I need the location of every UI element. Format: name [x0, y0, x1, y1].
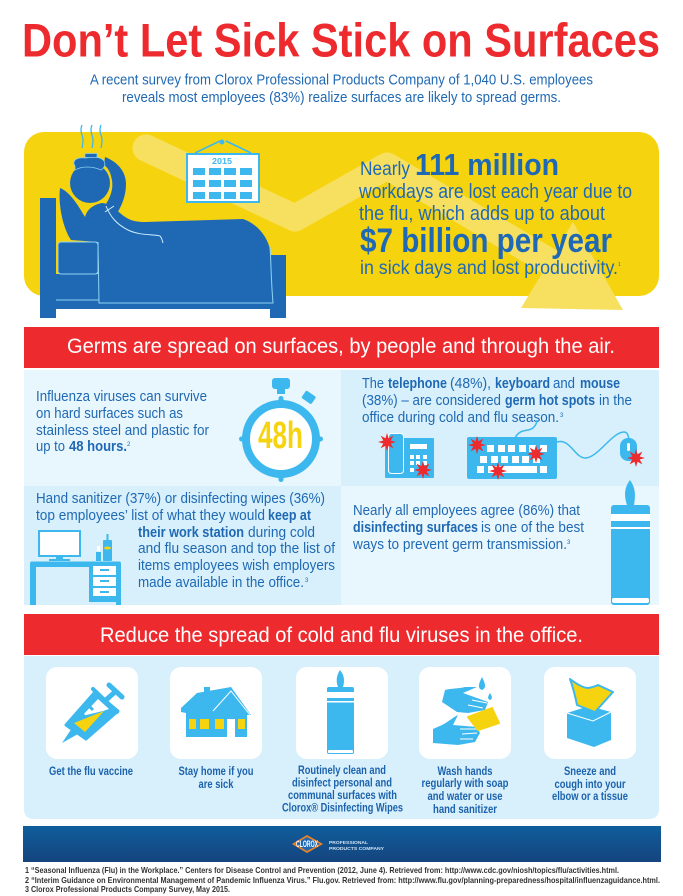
- subtitle: reveals most employees (83%) realize surfaces are likely to spread germs.: [122, 90, 561, 106]
- disinfecting text: [352, 502, 585, 553]
- panel: hand sanitizer and wipes: [24, 486, 341, 605]
- flu cost text: 1: [618, 262, 621, 268]
- decorative trend arrow: [146, 148, 623, 310]
- icon: mouse: [557, 432, 645, 467]
- tip: disinfect surfaces: Routinely clean and: [298, 765, 386, 777]
- bed frame: [40, 198, 286, 318]
- panel: virus survival: [24, 370, 341, 486]
- head: [70, 163, 110, 203]
- disinfecting text: Nearly all employees agree (86%) that: [353, 502, 581, 519]
- heading band: reduce the spread: [24, 614, 659, 655]
- logo: Clorox: [292, 835, 384, 853]
- tip: sneeze into tissue: cough into your: [554, 779, 626, 791]
- panel: germ hot spots: [341, 370, 659, 486]
- survival text: on hard surfaces such as: [36, 405, 183, 422]
- footer band with logo: [23, 826, 661, 862]
- flu cost text: Nearly: [360, 159, 410, 180]
- tip: wash hands: Wash hands: [438, 766, 492, 778]
- heading band: germs are spread: [24, 327, 659, 368]
- raised arm: [104, 157, 126, 215]
- blanket outlines: [98, 242, 273, 303]
- flu cost text: 111 million: [415, 147, 559, 182]
- sanitizer text: during cold: [248, 524, 315, 541]
- disinfecting text: ways to prevent germ transmission.: [352, 536, 567, 553]
- disinfecting text: is one of the best: [481, 519, 585, 536]
- panel: prevention tips: [24, 656, 659, 819]
- icon: calendar 2015: [187, 140, 259, 202]
- tip: sneeze into tissue: [544, 667, 636, 803]
- heading band: germs are spread: Germs are spread on surfaces, by people and through the air.: [67, 335, 615, 358]
- icon: house: [181, 687, 251, 738]
- person body and blanket: [60, 188, 273, 303]
- icon: tissue box: [567, 679, 613, 747]
- icon: stopwatch 48h: 48h: [258, 415, 303, 457]
- flu cost text: workdays are lost each year due to: [358, 181, 632, 203]
- tip: wash hands: [419, 667, 511, 816]
- tip: disinfect surfaces: Clorox® Disinfecting Wipes: [282, 802, 403, 814]
- sanitizer text: and flu season and top the list of: [138, 540, 336, 557]
- tip: disinfect surfaces: disinfect personal and: [292, 778, 392, 790]
- tip: wash hands: regularly with soap: [422, 778, 508, 790]
- flu cost text: [358, 147, 632, 279]
- icon: wipes canister: [327, 670, 354, 754]
- sanitizer text: made available in the office.: [138, 574, 304, 591]
- icon: hands and soap: [433, 677, 499, 745]
- hot spots text: 3: [560, 413, 564, 419]
- sanitizer text: 3: [305, 578, 309, 584]
- sanitizer text: Hand sanitizer (37%) or disinfecting wipes (36%): [36, 490, 325, 507]
- hot spots text: mouse: [580, 375, 620, 392]
- flu cost text: $7 billion per year: [360, 222, 612, 260]
- tip: disinfect surfaces: communal surfaces with: [288, 790, 397, 802]
- tip: sneeze into tissue: Sneeze and: [564, 766, 616, 778]
- disinfecting text: disinfecting surfaces: [353, 519, 478, 536]
- flu cost text: the flu, which adds up to about: [359, 203, 605, 225]
- tip: wash hands: hand sanitizer: [433, 804, 497, 816]
- tip: wash hands: and water or use: [428, 791, 502, 803]
- footnotes: 3 Clorox Professional Products Company Survey, May 2015.: [25, 884, 230, 894]
- sanitizer text: items employees wish employers: [138, 557, 335, 574]
- flu cost text: in sick days and lost productivity.: [360, 258, 618, 279]
- logo: Clorox: PROFESSIONAL: [329, 840, 368, 845]
- tip: flu vaccine: [46, 667, 138, 778]
- subtitle: A recent survey from Clorox Professional Products Company of 1,040 U.S. employees: [90, 72, 593, 88]
- tip: disinfect surfaces: [282, 667, 403, 814]
- hot spots text: in the: [599, 392, 632, 409]
- hot spots text: office during cold and flu season.: [362, 409, 559, 426]
- pillow: [58, 242, 98, 274]
- logo: Clorox: CLOROX: [296, 839, 318, 849]
- hot spots text: (48%),: [450, 375, 491, 392]
- icon: stopwatch 48h: [239, 378, 323, 482]
- sanitizer text: top employees’ list of what they would: [36, 507, 265, 524]
- tip: stay home: Stay home if you: [178, 766, 254, 778]
- sanitizer text: their work station: [138, 524, 244, 541]
- icon: calendar 2015: 2015: [212, 156, 232, 166]
- tip: stay home: are sick: [198, 779, 234, 791]
- survival text: stainless steel and plastic for: [36, 422, 209, 439]
- survival text: 2: [127, 442, 131, 448]
- subtitle: [90, 72, 593, 106]
- survival text: Influenza viruses can survive: [36, 388, 207, 405]
- hot spots text: The: [362, 375, 384, 392]
- survival text: up to: [36, 438, 65, 455]
- tip: stay home: [170, 667, 262, 791]
- ice bag: [74, 157, 105, 170]
- tip: sneeze into tissue: elbow or a tissue: [552, 791, 628, 803]
- hot spots text: telephone: [388, 375, 447, 392]
- survival text: 48 hours.: [69, 438, 127, 455]
- sanitizer text: [36, 490, 336, 591]
- panel: disinfecting surfaces: [341, 480, 659, 605]
- panel: flu cost hero: [24, 125, 659, 318]
- icon: desk: [30, 531, 121, 605]
- footnotes: [25, 865, 660, 894]
- hot spots text: germ hot spots: [505, 392, 595, 409]
- logo: Clorox: PRODUCTS COMPANY: [329, 846, 384, 851]
- heading band: reduce the spread: Reduce the spread of cold and flu viruses in the office.: [100, 624, 583, 647]
- survival text: [36, 388, 209, 455]
- hot spots text: (38%) – are considered: [362, 392, 501, 409]
- sanitizer text: keep at: [268, 507, 311, 524]
- disinfecting text: 3: [567, 540, 571, 546]
- icon: keyboard: [467, 420, 557, 480]
- icon: syringe: [62, 685, 122, 743]
- icon: sick person in bed: [40, 125, 286, 318]
- hot spots text: [362, 375, 632, 426]
- icon: disinfecting wipes canister: [611, 480, 650, 605]
- tip: flu vaccine: Get the flu vaccine: [49, 766, 133, 778]
- heat waves: [81, 125, 102, 148]
- icon: telephone: [378, 433, 434, 479]
- hot spots text: keyboard: [495, 375, 550, 392]
- hot spots text: and: [553, 375, 575, 392]
